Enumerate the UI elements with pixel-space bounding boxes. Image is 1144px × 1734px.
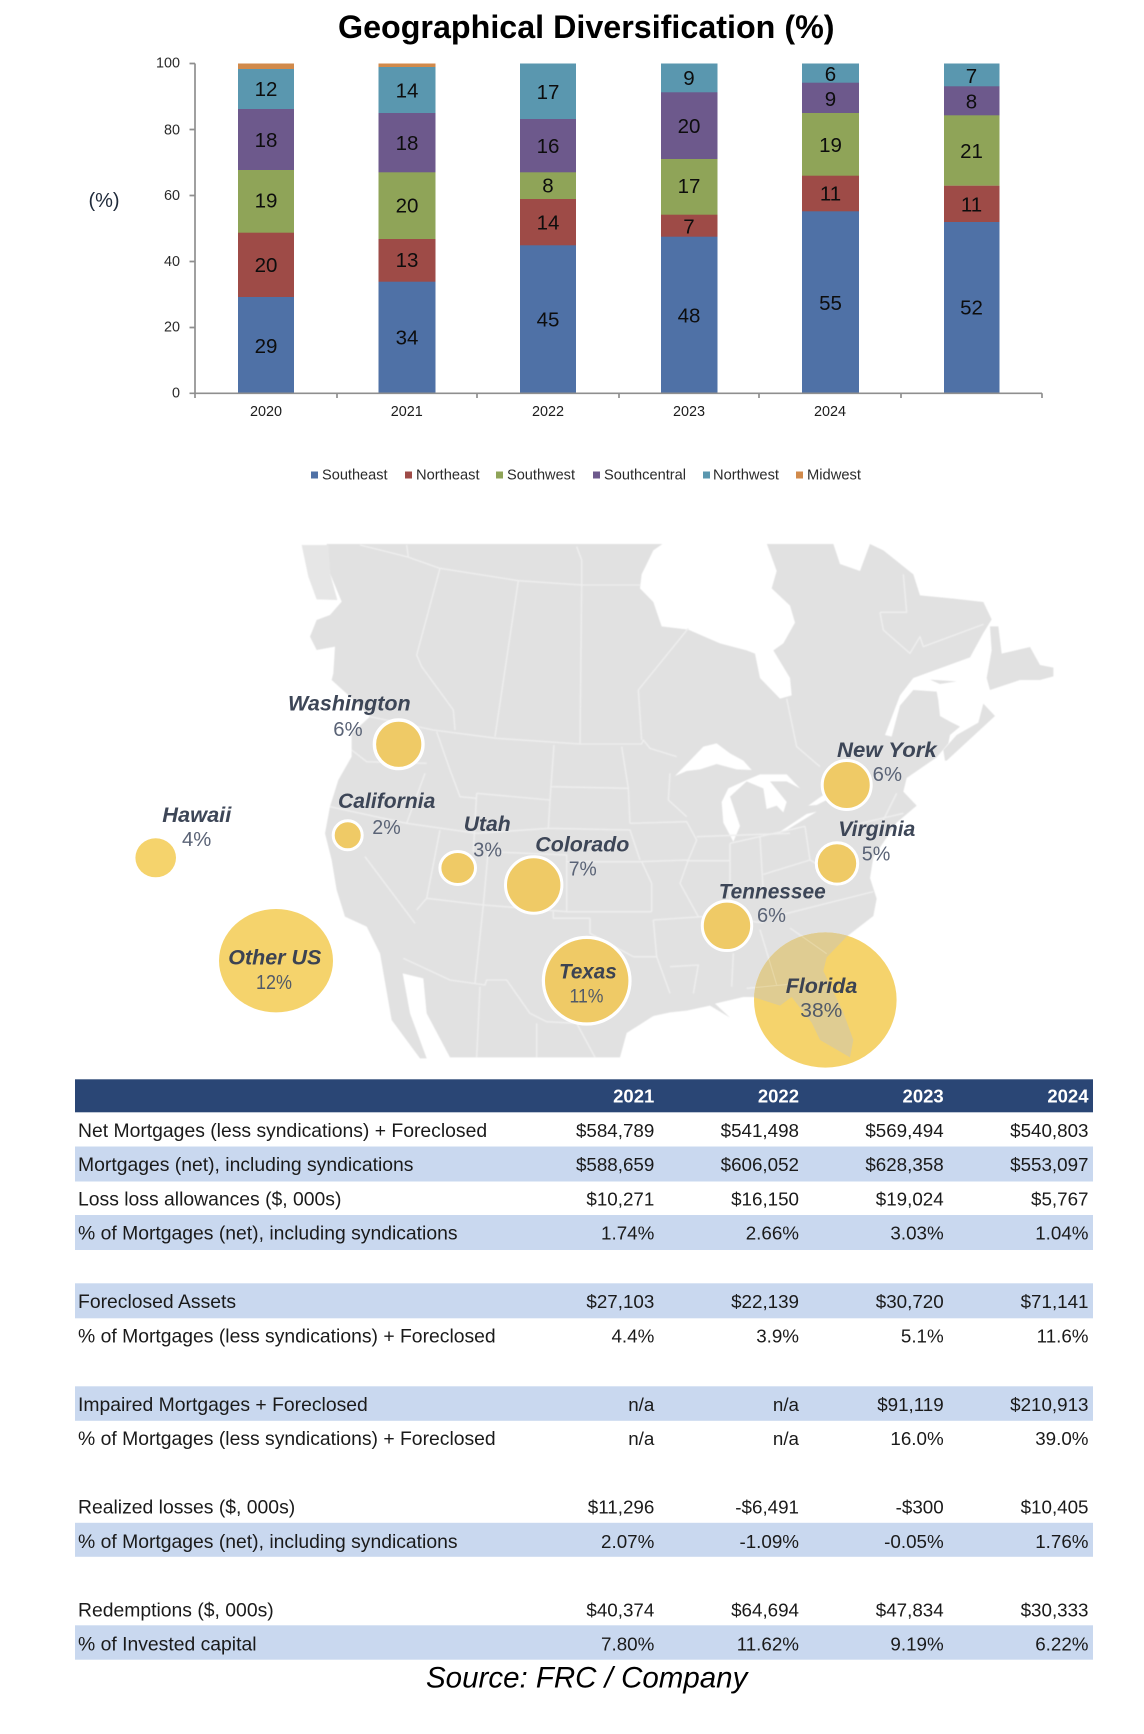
circle: California — [333, 789, 435, 850]
circle: Virginia — [816, 817, 915, 884]
circle: Hawaii — [135, 803, 232, 877]
bar 2023: 9 — [683, 67, 695, 90]
chart legend: Northwest — [713, 467, 779, 483]
chart legend: Midwest — [807, 467, 861, 483]
row: mortgages net: $606,052 — [721, 1154, 799, 1175]
y axis labels: 20 — [164, 320, 180, 336]
circle: Texas — [543, 937, 630, 1024]
map of North America — [135, 543, 1053, 1068]
row: foreclosed percent: % of Mortgages (less syndications) + Foreclosed — [78, 1326, 496, 1348]
row: net mortgages: $541,498 — [721, 1120, 799, 1141]
row: realized losses percent: 2.07% — [601, 1531, 655, 1552]
row: mortgages net: $628,358 — [865, 1154, 944, 1175]
row: foreclosed percent: 5.1% — [901, 1326, 944, 1346]
bar 2020: 19 — [255, 190, 277, 212]
y axis unit label: (%) — [88, 190, 120, 212]
row: redemptions: $30,333 — [1021, 1600, 1088, 1620]
source note: Source: FRC / Company — [426, 1662, 750, 1695]
row: redemptions: $47,834 — [876, 1600, 944, 1620]
bar 2023: 17 — [678, 175, 700, 198]
row: foreclosed assets: $71,141 — [1021, 1291, 1088, 1312]
row: invested capital percent: 9.19% — [890, 1634, 944, 1655]
row: percent of mortgages net: % of Mortgages (net), including syndications — [78, 1223, 458, 1245]
bar unlabelled final period — [944, 64, 1000, 393]
bar 2021: 14 — [396, 80, 418, 102]
row: loan loss allowances: $16,150 — [731, 1188, 799, 1210]
circle: Other US: Other US — [228, 945, 322, 969]
circle: Colorado — [506, 833, 629, 913]
chart legend: Southeast — [322, 467, 388, 483]
circle: Florida — [754, 932, 897, 1068]
row: invested capital percent: % of Invested capital — [78, 1634, 256, 1656]
x axis labels: 2023 — [673, 404, 705, 420]
row: impaired percent: n/a — [773, 1428, 800, 1449]
circle: New York — [822, 738, 938, 810]
circle: Texas: 11% — [570, 987, 604, 1008]
row: net mortgages: Net Mortgages (less syndications) + Foreclosed — [78, 1120, 487, 1142]
row: realized losses: -$6,491 — [735, 1497, 799, 1518]
row: loan loss allowances: Loss loss allowances ($, 000s) — [78, 1188, 341, 1210]
y axis labels: 100 — [156, 55, 180, 71]
y axis labels: 60 — [164, 188, 180, 204]
row: redemptions: $40,374 — [586, 1600, 654, 1620]
x axis labels: 2021 — [391, 404, 423, 420]
bar 2022: 17 — [537, 81, 559, 104]
row: impaired mortgages: $91,119 — [877, 1394, 944, 1415]
row: impaired mortgages: Impaired Mortgages + Foreclosed — [78, 1394, 368, 1416]
bar 2022 — [520, 64, 576, 393]
bar 2021 — [378, 64, 436, 393]
row: realized losses — [78, 1497, 1088, 1519]
bar 2022: 14 — [537, 212, 559, 234]
row: realized losses: $11,296 — [588, 1497, 654, 1518]
row: redemptions: $64,694 — [731, 1600, 799, 1620]
circle: Colorado: Colorado — [535, 833, 629, 857]
bar 2023: 48 — [678, 304, 700, 328]
row: redemptions — [78, 1600, 1088, 1622]
row: percent of mortgages net: 1.04% — [1035, 1223, 1089, 1244]
bar 2020: 20 — [255, 254, 277, 277]
circle: Florida: 38% — [800, 1000, 843, 1022]
row: realized losses percent: -1.09% — [739, 1531, 799, 1552]
row: mortgages net: $553,097 — [1010, 1154, 1088, 1175]
circle: Tennessee: Tennessee — [719, 880, 826, 904]
row: impaired mortgages: n/a — [628, 1394, 655, 1415]
bar 2024: 55 — [819, 292, 842, 315]
row: loan loss allowances: $5,767 — [1031, 1188, 1088, 1210]
circle: Other US: 12% — [256, 972, 292, 994]
circle: California: 2% — [372, 817, 401, 839]
row: realized losses: $10,405 — [1021, 1497, 1088, 1518]
stacked bar chart: geographical diversification — [88, 55, 1042, 420]
bar 2020: 12 — [255, 78, 277, 101]
row: redemptions: Redemptions ($, 000s) — [78, 1600, 274, 1622]
chart legend: Southwest — [507, 467, 575, 483]
row: realized losses: Realized losses ($, 000s) — [78, 1497, 295, 1519]
bar 2022: 16 — [537, 135, 559, 158]
row: invested capital percent: 6.22% — [1035, 1634, 1089, 1655]
table header — [75, 1079, 1093, 1112]
circle: Tennessee: 6% — [757, 905, 786, 927]
circle: Utah: Utah — [464, 812, 511, 836]
bar 2021: 13 — [396, 249, 418, 272]
circle: Virginia: Virginia — [838, 817, 915, 841]
circle: Hawaii: Hawaii — [162, 803, 232, 827]
row: impaired percent: 39.0% — [1035, 1428, 1089, 1449]
row: foreclosed percent — [78, 1326, 1089, 1348]
row: percent of mortgages net — [75, 1215, 1093, 1250]
bar 2024: 11 — [820, 182, 841, 206]
circle: Colorado: 7% — [569, 858, 597, 880]
row: invested capital percent — [75, 1625, 1093, 1660]
bar unlabelled final period: 52 — [960, 296, 983, 320]
y axis labels: 80 — [164, 122, 180, 138]
bar 2022: 45 — [537, 308, 559, 332]
bar 2024: 6 — [825, 63, 836, 86]
row: mortgages net — [75, 1146, 1093, 1182]
bar 2020 — [238, 64, 294, 393]
data table — [75, 1079, 1093, 1660]
chart legend: Southcentral — [604, 467, 686, 483]
circle: Texas: Texas — [559, 960, 617, 984]
row: percent of mortgages net: 3.03% — [890, 1223, 944, 1244]
row: impaired percent: n/a — [628, 1428, 655, 1449]
bar 2024 — [802, 63, 859, 393]
circle: California: California — [338, 789, 435, 813]
table header: 2023 — [903, 1086, 944, 1107]
row: invested capital percent: 7.80% — [601, 1634, 655, 1655]
row: impaired percent: % of Mortgages (less syndications) + Foreclosed — [78, 1428, 496, 1450]
circle: Washington: Washington — [288, 692, 411, 716]
row: net mortgages — [78, 1120, 1088, 1142]
row: foreclosed assets: $22,139 — [731, 1291, 799, 1312]
land mass — [302, 543, 1053, 1058]
bar 2023: 7 — [683, 216, 695, 238]
circle: Utah — [440, 812, 511, 884]
row: impaired mortgages: n/a — [773, 1394, 800, 1415]
row: impaired percent: 16.0% — [890, 1428, 944, 1449]
table header: 2022 — [758, 1086, 799, 1107]
row: realized losses: -$300 — [896, 1497, 944, 1518]
bar 2022: 8 — [542, 174, 554, 198]
bar 2020: 29 — [255, 335, 277, 358]
bar 2023: 20 — [678, 115, 700, 138]
bar 2020: 18 — [255, 129, 277, 152]
bar unlabelled final period: 8 — [966, 90, 977, 114]
bar unlabelled final period: 7 — [966, 65, 977, 88]
circle: Florida: Florida — [786, 974, 857, 998]
row: foreclosed percent: 11.6% — [1037, 1326, 1089, 1346]
row: foreclosed assets: Foreclosed Assets — [78, 1291, 236, 1313]
row: foreclosed percent: 3.9% — [756, 1326, 799, 1346]
circle: New York: New York — [837, 738, 938, 762]
bar unlabelled final period: 21 — [960, 140, 983, 163]
circle: Other US — [219, 909, 333, 1012]
row: loan loss allowances: $10,271 — [586, 1188, 654, 1210]
row: impaired percent — [78, 1428, 1089, 1450]
bar 2021: 18 — [396, 132, 418, 155]
row: impaired mortgages: $210,913 — [1010, 1394, 1088, 1415]
circle: Hawaii: 4% — [182, 829, 212, 851]
x axis labels — [250, 404, 846, 420]
row: mortgages net: Mortgages (net), including syndications — [78, 1154, 413, 1176]
circle: Virginia: 5% — [862, 844, 891, 866]
row: net mortgages: $569,494 — [865, 1120, 944, 1141]
row: realized losses percent: -0.05% — [884, 1531, 944, 1552]
circle: Utah: 3% — [473, 840, 502, 862]
x axis labels: 2024 — [814, 404, 846, 420]
row: percent of mortgages net: 1.74% — [601, 1223, 655, 1244]
row: loan loss allowances — [78, 1188, 1088, 1210]
row: percent of mortgages net: 2.66% — [746, 1223, 799, 1244]
bar 2023 — [661, 64, 718, 393]
row: net mortgages: $584,789 — [576, 1120, 654, 1141]
row: realized losses percent — [75, 1523, 1093, 1557]
bar 2024: 9 — [825, 88, 836, 111]
title: Geographical Diversification (%) — [338, 9, 834, 45]
table header: 2024 — [1047, 1086, 1089, 1107]
row: realized losses percent: 1.76% — [1035, 1531, 1089, 1552]
row: foreclosed assets — [75, 1283, 1093, 1318]
circle: Washington — [288, 692, 423, 769]
row: loan loss allowances: $19,024 — [876, 1188, 944, 1210]
bar 2021: 20 — [396, 194, 418, 218]
circle: New York: 6% — [873, 764, 902, 786]
chart legend — [311, 467, 861, 483]
bar 2021: 34 — [396, 326, 418, 350]
row: foreclosed percent: 4.4% — [611, 1326, 655, 1346]
x axis labels: 2022 — [532, 404, 564, 420]
circle: Tennessee — [702, 880, 826, 950]
y axis labels: 40 — [164, 254, 180, 270]
row: net mortgages: $540,803 — [1010, 1120, 1088, 1141]
bar unlabelled final period: 11 — [961, 194, 982, 216]
row: mortgages net: $588,659 — [576, 1154, 654, 1175]
chart legend: Northeast — [416, 467, 480, 483]
row: invested capital percent: 11.62% — [737, 1634, 799, 1655]
y axis labels — [156, 55, 180, 402]
circle: Washington: 6% — [333, 719, 363, 741]
row: realized losses percent: % of Mortgages (net), including syndications — [78, 1531, 458, 1553]
row: foreclosed assets: $27,103 — [586, 1291, 654, 1312]
bar 2024: 19 — [819, 134, 842, 157]
row: foreclosed assets: $30,720 — [876, 1291, 944, 1312]
table header: 2021 — [613, 1086, 654, 1107]
row: impaired mortgages — [75, 1386, 1093, 1421]
x axis labels: 2020 — [250, 404, 282, 420]
y axis labels: 0 — [172, 386, 180, 402]
